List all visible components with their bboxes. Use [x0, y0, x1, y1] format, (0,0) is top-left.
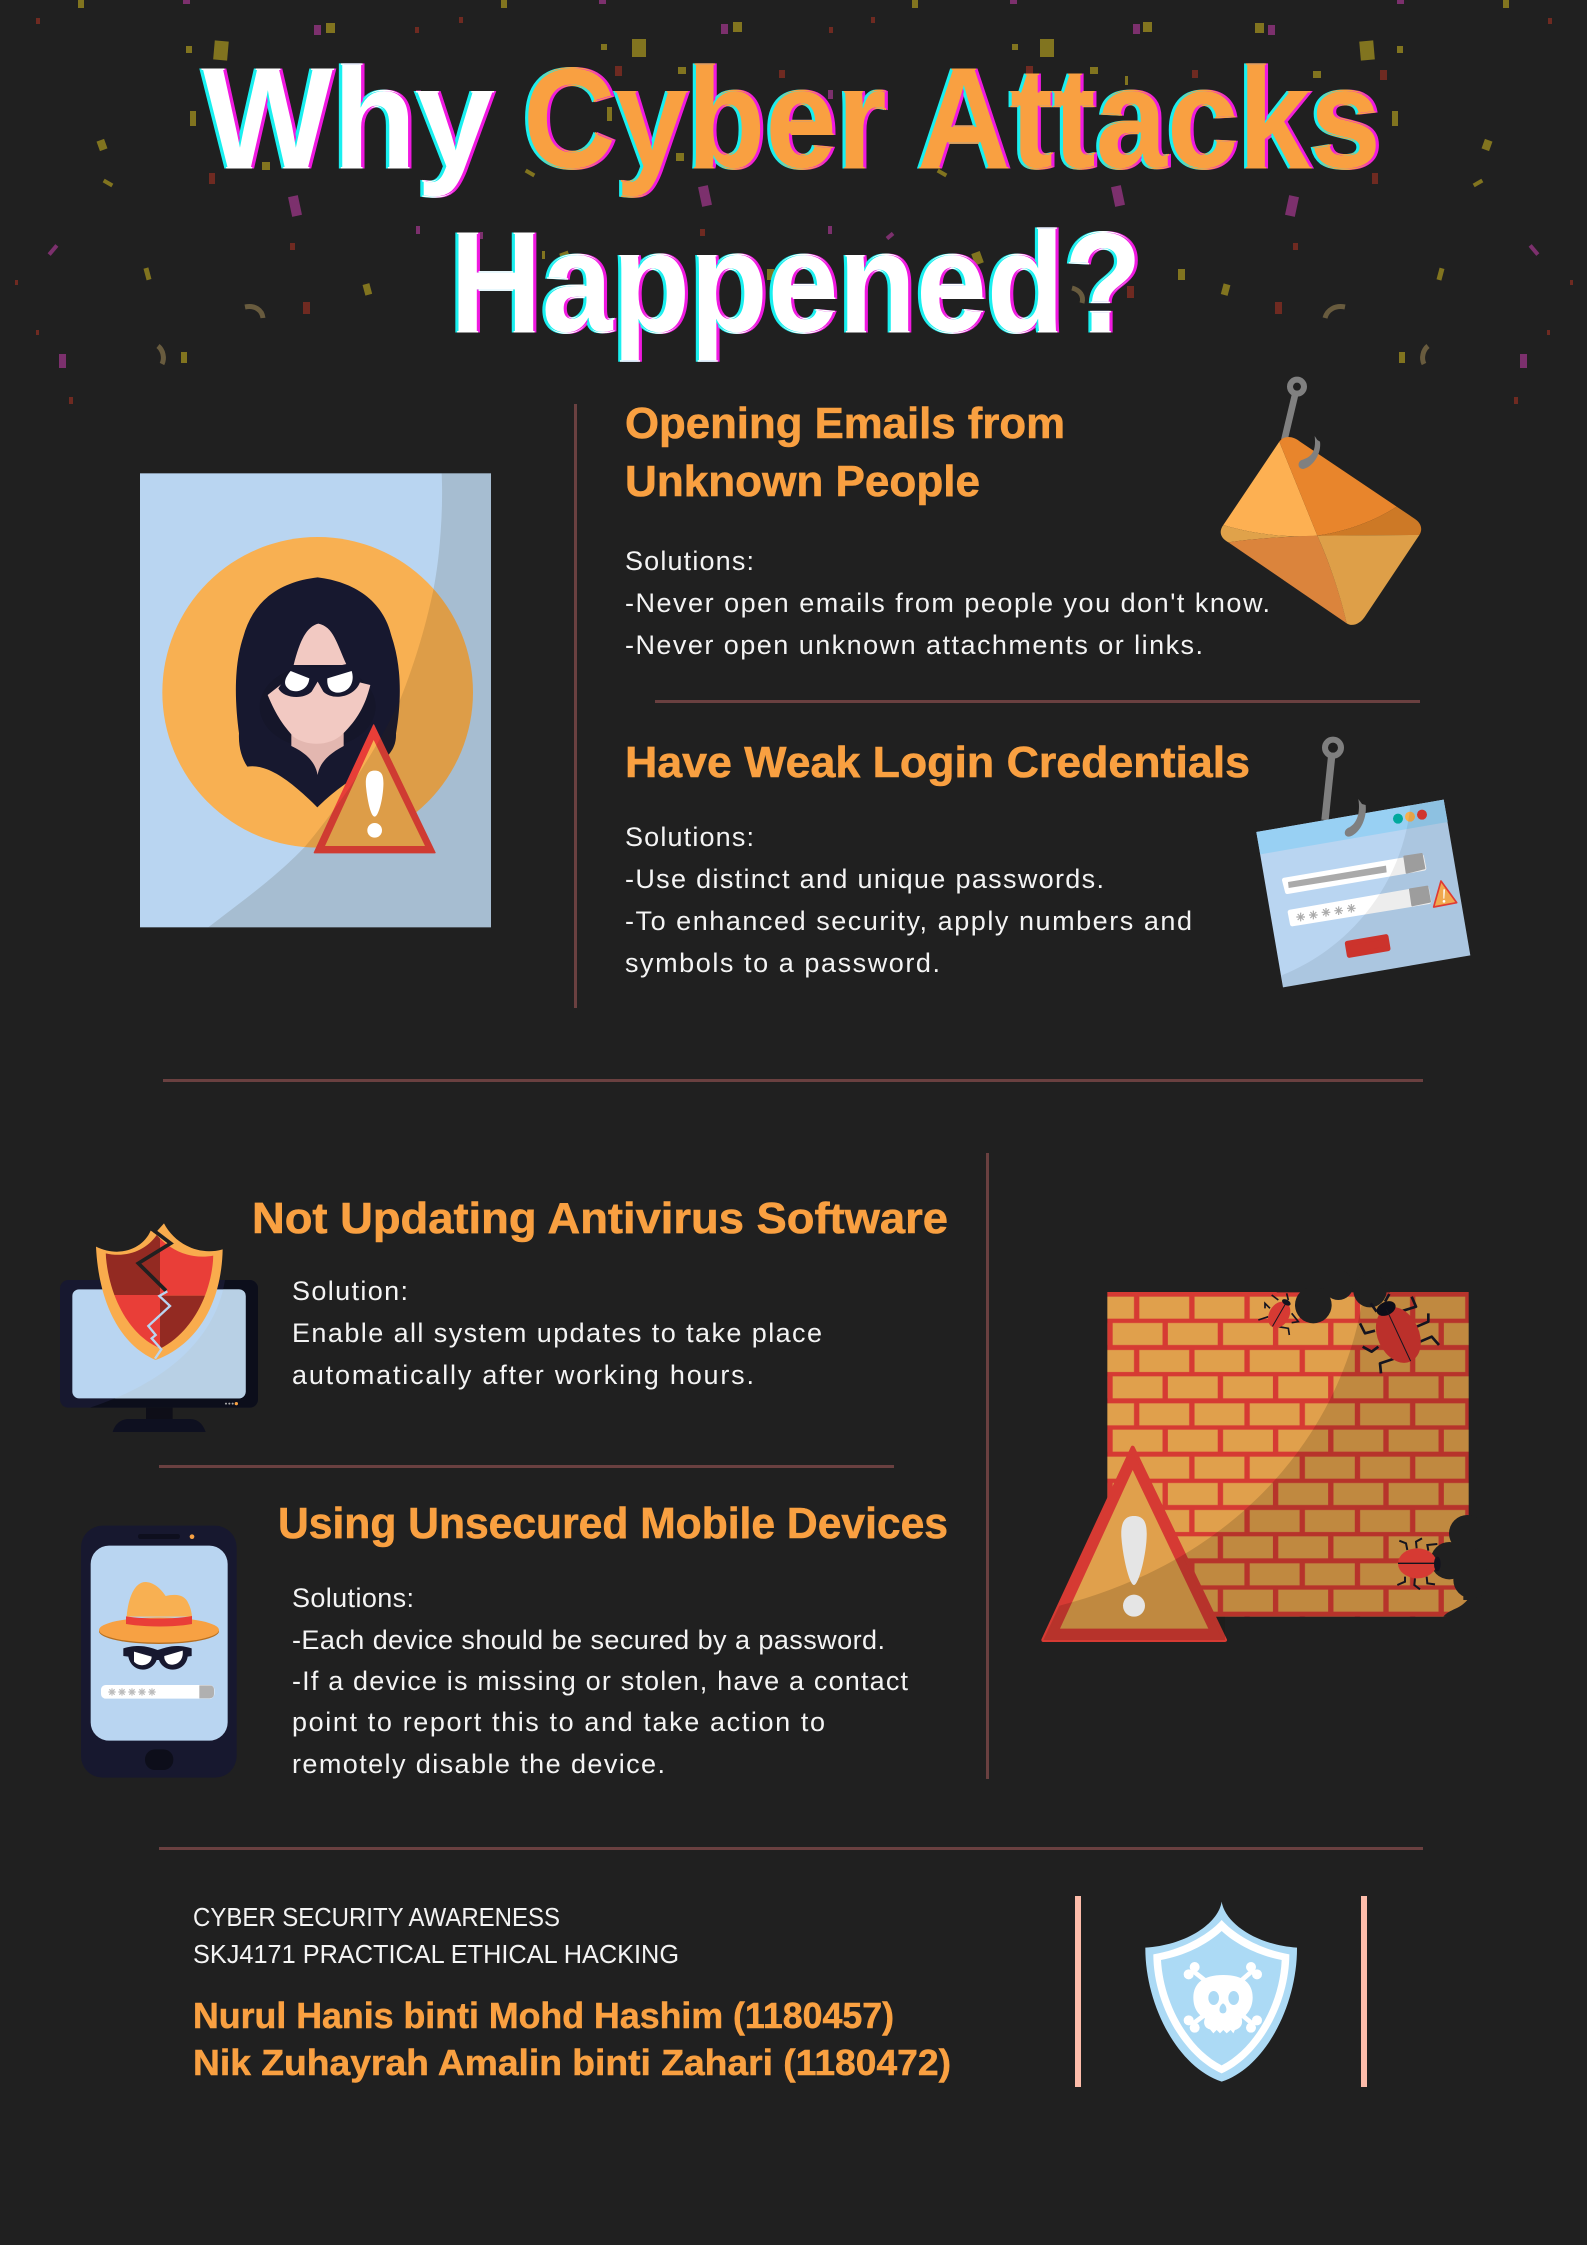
title line 1: Why: Why	[203, 39, 493, 197]
footer course text	[193, 1902, 679, 1969]
icon: hooked login window	[1256, 740, 1470, 987]
footer course text: SKJ4171 PRACTICAL ETHICAL HACKING	[193, 1939, 679, 1969]
text block: email solutions	[625, 546, 1270, 660]
text block: credential solutions: -Use distinct and unique passwords.	[625, 864, 1104, 894]
text block: mobile solutions: -If a device is missing or stolen, have a contact	[292, 1666, 908, 1696]
confetti decoration	[15, 0, 1573, 404]
text block: mobile solutions: point to report this to and take action to	[292, 1707, 825, 1737]
text block: credential solutions: symbols to a password.	[625, 948, 940, 978]
illustration: hacker portrait with warning	[140, 473, 491, 927]
heading: opening emails: Opening Emails from	[625, 399, 1065, 448]
text block: credential solutions: Solutions:	[625, 822, 754, 852]
text block: mobile solutions: -Each device should be secured by a password.	[292, 1625, 885, 1655]
title line 1: Cyber Attacks: Cyber Attacks	[523, 39, 1381, 197]
illustration: phone with spy	[81, 1526, 237, 1778]
heading: opening emails: Unknown People	[625, 457, 980, 506]
footer author names: Nik Zuhayrah Amalin binti Zahari (1180472)	[193, 2042, 951, 2083]
left pink bar	[1075, 1896, 1081, 2087]
illustration: brick firewall with bugs and warning	[1041, 1292, 1469, 1642]
text block: antivirus solution	[292, 1276, 822, 1390]
title line 2: Happened?: Happened?	[450, 203, 1142, 361]
heading: antivirus: Not Updating Antivirus Software	[252, 1194, 948, 1243]
icon: skull shield	[1145, 1902, 1297, 2082]
text block: credential solutions	[625, 822, 1192, 978]
heading: mobile devices: Using Unsecured Mobile Devices	[278, 1499, 948, 1548]
text block: email solutions: -Never open emails from people you don't know.	[625, 588, 1270, 618]
heading: weak credentials: Have Weak Login Credentials	[625, 738, 1250, 787]
text block: antivirus solution: Solution:	[292, 1276, 408, 1306]
text block: antivirus solution: Enable all system updates to take place	[292, 1318, 822, 1348]
text block: antivirus solution: automatically after working hours.	[292, 1360, 754, 1390]
text block: mobile solutions	[292, 1583, 908, 1779]
text block: credential solutions: -To enhanced security, apply numbers and	[625, 906, 1192, 936]
icon: hooked envelope	[1221, 380, 1421, 625]
text block: mobile solutions: remotely disable the device.	[292, 1749, 665, 1779]
right pink bar	[1361, 1896, 1367, 2087]
text block: email solutions: Solutions:	[625, 546, 754, 576]
text block: mobile solutions: Solutions:	[292, 1583, 414, 1613]
footer author names	[193, 1995, 951, 2083]
footer author names: Nurul Hanis binti Mohd Hashim (1180457)	[193, 1995, 894, 2036]
text block: email solutions: -Never open unknown attachments or links.	[625, 630, 1203, 660]
heading: opening emails	[625, 399, 1065, 506]
title	[203, 39, 1381, 361]
illustration: monitor with cracked shield	[60, 1223, 258, 1432]
footer course text: CYBER SECURITY AWARENESS	[193, 1902, 560, 1932]
